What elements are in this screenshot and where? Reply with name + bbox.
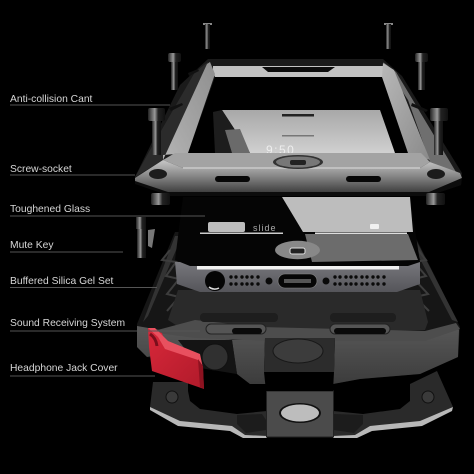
label: Sound Receiving System: Sound Receiving System bbox=[10, 318, 125, 329]
camera tab bbox=[266, 391, 334, 437]
front metal frame bbox=[135, 59, 462, 196]
phone bbox=[175, 197, 420, 292]
speaker slots in case bbox=[206, 324, 266, 334]
screws bbox=[148, 23, 448, 205]
dark cavity by jack bbox=[178, 340, 237, 374]
label: Toughened Glass: Toughened Glass bbox=[10, 204, 90, 215]
phone screen bbox=[175, 197, 420, 266]
label: Anti-collision Cant: Anti-collision Cant bbox=[10, 94, 93, 105]
headphone jack bbox=[205, 271, 225, 291]
jack plug bbox=[202, 344, 228, 370]
black outer frame shell bbox=[135, 59, 462, 196]
corner holes bbox=[149, 169, 167, 179]
label: Mute Key bbox=[10, 240, 123, 252]
rubber case body bbox=[137, 232, 460, 391]
lightning port bbox=[278, 274, 317, 288]
mute key bbox=[136, 217, 155, 258]
slots bbox=[215, 176, 250, 182]
red headphone jack cover bbox=[148, 328, 204, 389]
centre recess bbox=[264, 338, 335, 391]
label: Buffered Silica Gel Set: Buffered Silica Gel Set bbox=[10, 276, 114, 287]
slide text: slide bbox=[253, 223, 277, 233]
phone side bbox=[175, 262, 420, 292]
case ribs bbox=[162, 250, 429, 311]
label: Screw-socket bbox=[10, 164, 135, 176]
home button bbox=[273, 155, 323, 169]
speaker holes bbox=[229, 275, 386, 286]
label: Screw-socket: Screw-socket bbox=[10, 164, 72, 175]
frame bars bbox=[213, 66, 386, 77]
label: Mute Key: Mute Key bbox=[10, 240, 54, 251]
bottom plate bbox=[150, 371, 453, 438]
clock text: 9:50 bbox=[266, 143, 295, 157]
label: Headphone Jack Cover: Headphone Jack Cover bbox=[10, 363, 118, 374]
side slots bbox=[188, 69, 199, 76]
window opening and glass bbox=[188, 77, 408, 153]
